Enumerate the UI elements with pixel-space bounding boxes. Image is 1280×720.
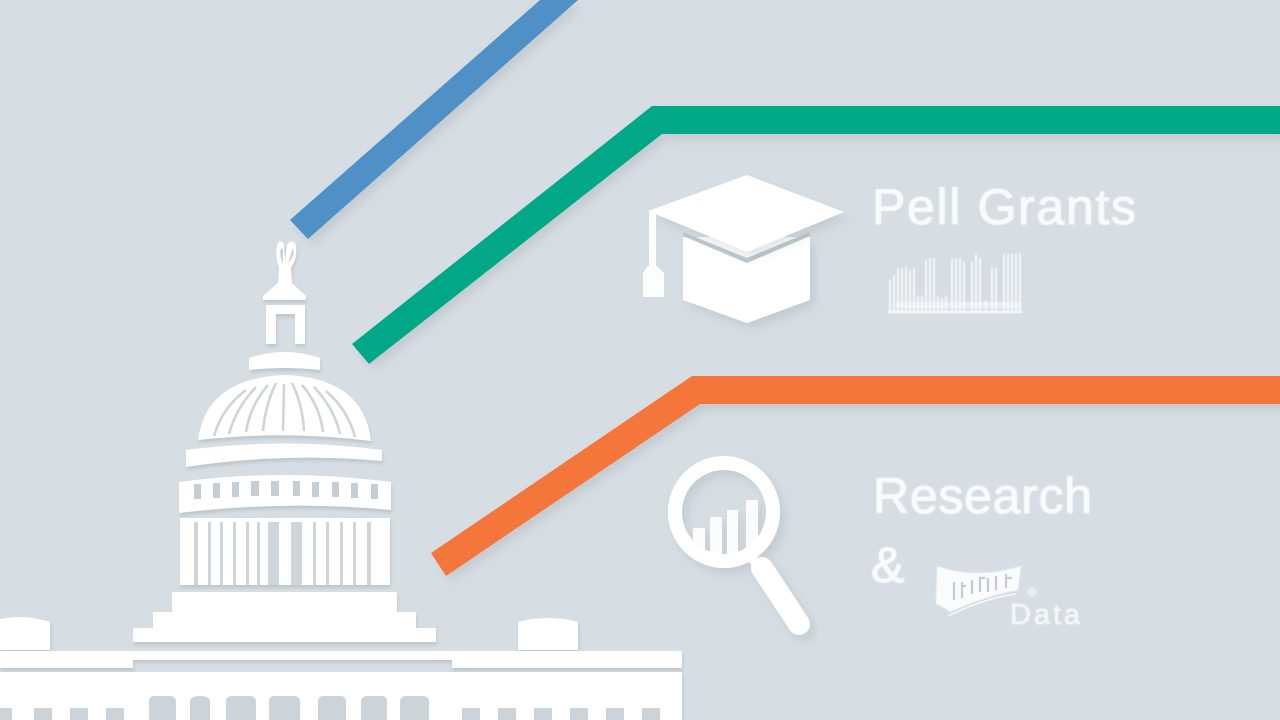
green line: [352, 106, 1280, 364]
orange line: [431, 376, 1280, 576]
icon: open book banner: [936, 566, 1037, 616]
icon: magnifying glass: [675, 463, 799, 624]
label: Data: Data: [1010, 599, 1081, 631]
dome: [198, 375, 371, 441]
heading: Research: Research: [873, 468, 1092, 524]
tassel: [643, 212, 664, 297]
lens bars: [693, 500, 758, 556]
ampersand: &: [871, 537, 904, 593]
heading: Pell Grants: Pell Grants: [872, 179, 1136, 235]
cap body: [683, 237, 810, 323]
mortarboard: [648, 175, 844, 252]
bar chart: Pell Grants: [888, 253, 1022, 312]
colonnade: [180, 518, 390, 585]
stepped base: [133, 592, 436, 642]
icon: Capitol building: [0, 241, 682, 720]
lens ring: [675, 463, 773, 561]
wings: [0, 617, 682, 720]
dome bands and drum: [179, 444, 391, 513]
statue and lantern: [249, 241, 320, 370]
windows: [0, 696, 660, 720]
cap notch shadow: [683, 232, 810, 263]
handle: [762, 568, 799, 624]
blue line: [290, 0, 578, 239]
icon: graduation cap: [643, 175, 844, 323]
